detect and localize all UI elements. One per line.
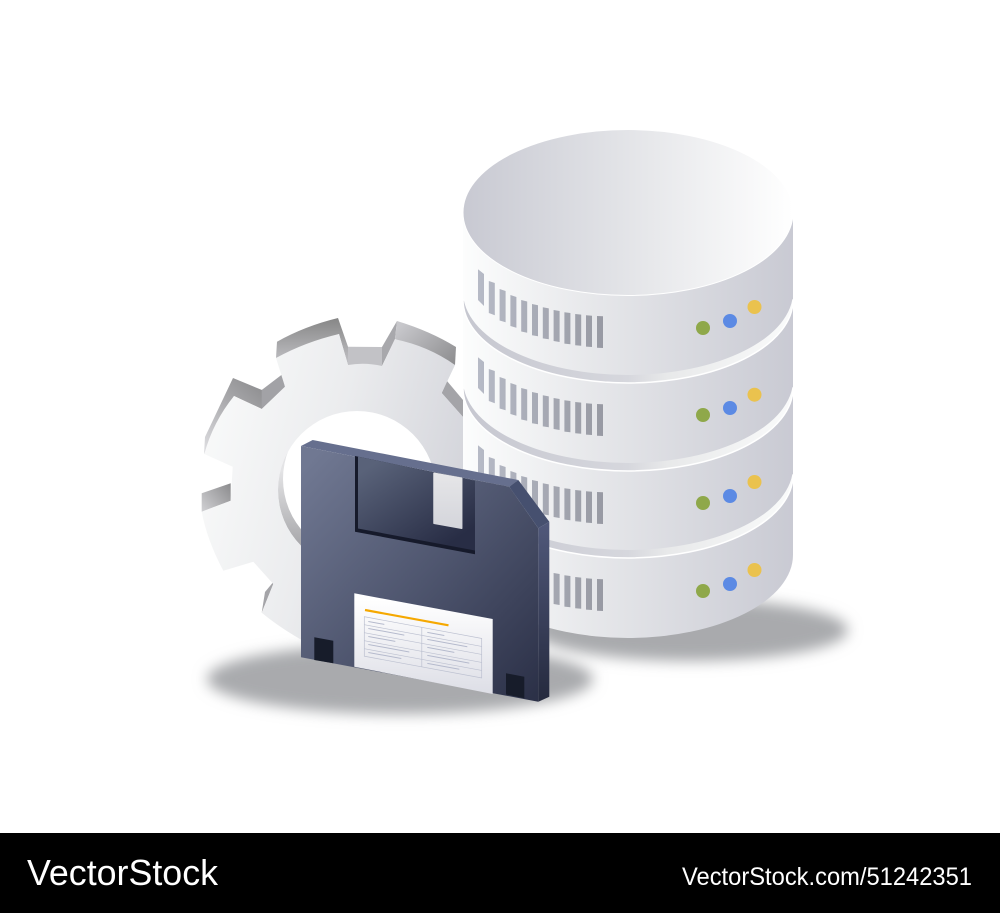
footer image id: VectorStock.com/51242351	[682, 863, 972, 891]
gear centre hole	[278, 411, 434, 546]
floppy right notch	[506, 673, 524, 698]
database server stack	[463, 130, 793, 638]
floppy left notch	[314, 637, 333, 663]
server layer 4	[463, 465, 793, 638]
floppy shutter tab	[434, 473, 462, 528]
shadow: floppy disk	[207, 644, 593, 714]
gear face	[202, 334, 480, 650]
label orange stripe	[365, 610, 448, 625]
server layer 1	[463, 212, 793, 375]
gear extruded tooth edges	[202, 318, 463, 613]
icon: floppy disk	[301, 440, 549, 702]
server layer 3	[463, 380, 793, 550]
floppy side edge	[538, 522, 549, 702]
floppy chamfered corner	[509, 480, 549, 528]
floppy front face	[301, 446, 538, 702]
icon: gear	[202, 318, 480, 650]
floppy label	[354, 593, 493, 694]
shadow: database	[532, 599, 848, 661]
database top surface	[463, 130, 793, 296]
floppy top edge	[301, 440, 518, 487]
footer bar	[0, 833, 1000, 913]
footer brand: VectorStock	[27, 852, 219, 893]
server layer 2	[463, 292, 793, 463]
label table	[364, 617, 482, 678]
floppy shutter window	[355, 456, 475, 554]
